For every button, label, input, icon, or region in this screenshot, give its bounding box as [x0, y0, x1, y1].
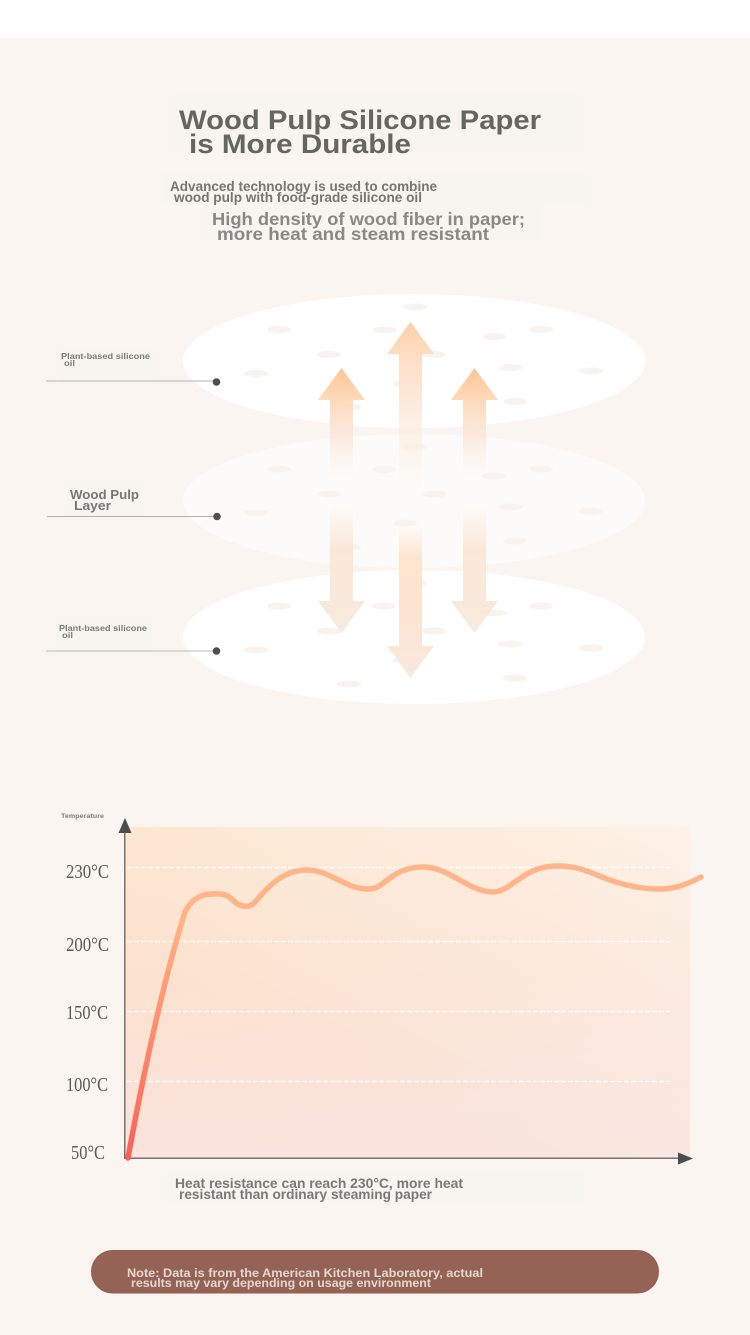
subtitle: technology — [162, 172, 588, 205]
temperature chart — [61, 813, 701, 1164]
y axis labels — [66, 861, 109, 1164]
label: wood pulp layer — [47, 481, 221, 520]
bottom silicone oil disc — [183, 570, 645, 704]
y axis labels: 200°C — [66, 934, 109, 956]
title: is More Durable — [189, 129, 411, 159]
arrow: up left — [318, 368, 365, 482]
label: bottom plant-based silicone oil: oil — [62, 630, 73, 640]
arrow: down right — [451, 505, 498, 633]
chart area — [125, 827, 690, 1158]
label: wood pulp layer: Wood Pulp — [70, 487, 139, 502]
note pill: results may vary depending on usage environment — [131, 1278, 431, 1290]
chart caption: resistant than ordinary steaming paper — [179, 1187, 433, 1202]
y axis labels: 100°C — [66, 1074, 108, 1096]
middle wood pulp disc — [183, 434, 645, 568]
note pill: Note: Data is from the American Kitchen Laboratory, actual — [127, 1268, 483, 1280]
label: bottom plant-based silicone oil: Plant-based silicone — [59, 623, 147, 633]
label: top plant-based silicone oil — [46, 347, 220, 386]
top silicone oil disc — [183, 294, 645, 428]
arrow: up right — [451, 368, 498, 482]
chart caption — [166, 1170, 584, 1202]
chart caption: Heat resistance can reach 230°C, more heat — [175, 1176, 464, 1191]
y axis labels: 150°C — [66, 1002, 108, 1024]
y axis labels: 230°C — [66, 861, 109, 883]
y axis labels: 50°C — [71, 1142, 105, 1164]
subtitle: technology: Advanced technology is used to combine — [170, 179, 437, 194]
heat curve — [128, 866, 701, 1158]
subtitle: technology: wood pulp with food-grade silicone oil — [173, 190, 422, 205]
label: bottom plant-based silicone oil — [46, 617, 220, 655]
x axis — [124, 1152, 693, 1164]
y axis — [118, 818, 132, 1159]
title — [172, 93, 580, 159]
arrow: up middle — [387, 322, 434, 500]
subtitle: density: more heat and steam resistant — [217, 224, 489, 244]
title: Wood Pulp Silicone Paper — [179, 105, 542, 135]
arrow: down left — [318, 505, 365, 633]
label: top plant-based silicone oil: Plant-based silicone — [61, 351, 150, 361]
label: top plant-based silicone oil: oil — [64, 358, 75, 368]
axis title: Temperature — [61, 813, 104, 820]
label: wood pulp layer: Layer — [74, 498, 111, 513]
layer diagram — [183, 294, 645, 704]
note pill — [92, 1250, 658, 1293]
subtitle: density: High density of wood fiber in paper; — [212, 209, 525, 229]
arrow: down middle — [387, 525, 434, 678]
subtitle: density — [206, 207, 542, 244]
